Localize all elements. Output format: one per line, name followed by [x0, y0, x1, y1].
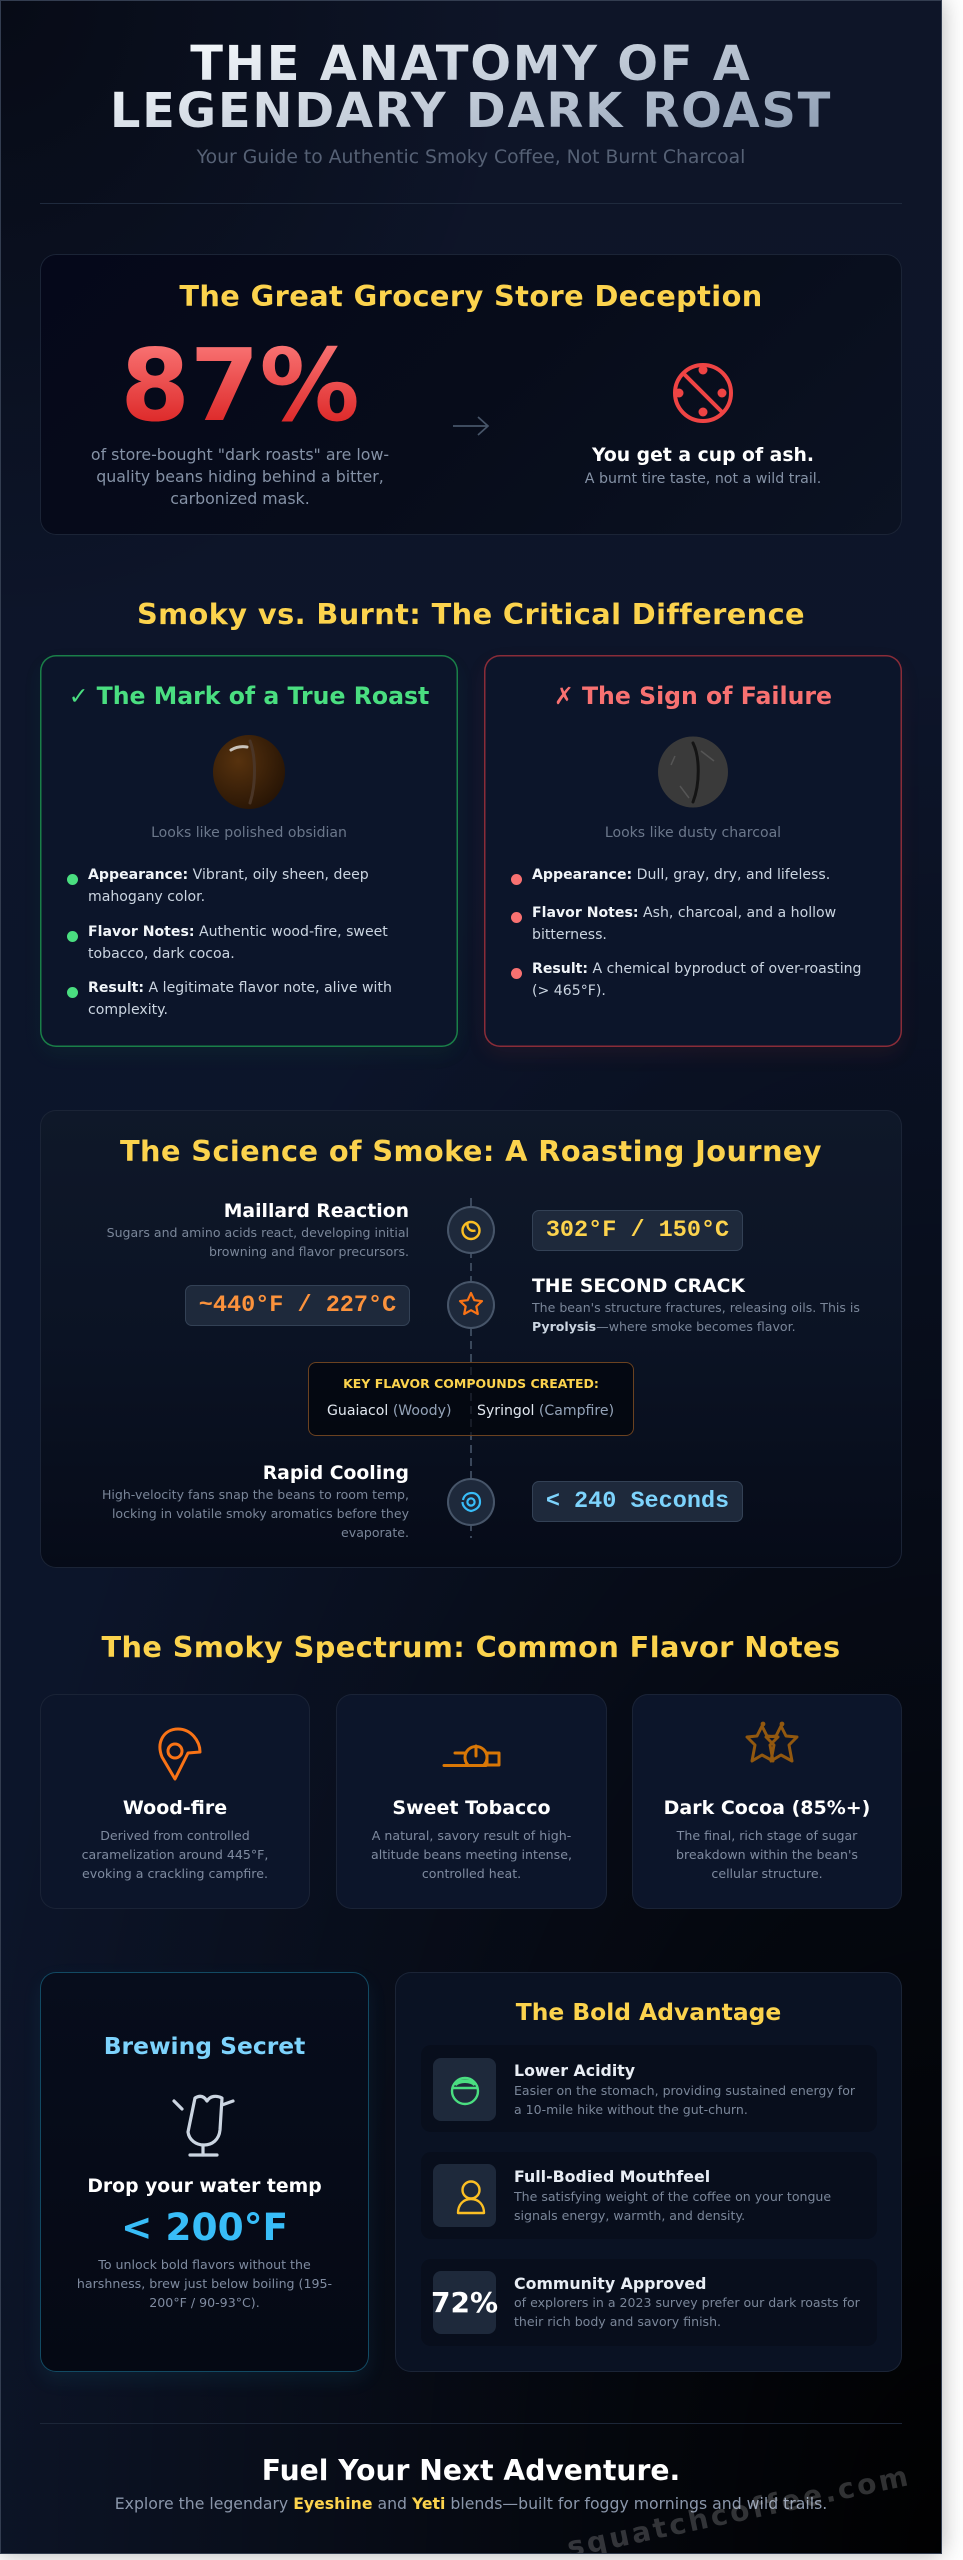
step: second crack text: Pyrolysis—where smoke becomes flavor. — [532, 1319, 796, 1334]
list: traits: Appearance: Vibrant, oily sheen, deep — [88, 867, 369, 883]
footer heading: Fuel Your Next Adventure. — [262, 2454, 680, 2487]
description — [676, 1828, 858, 1881]
description: cellular structure. — [711, 1866, 823, 1881]
item: mouthfeel: The satisfying weight of the coffee on your tongue — [514, 2189, 831, 2204]
list: traits: (> 465°F). — [532, 983, 606, 999]
panel: brewing secret — [40, 1972, 369, 2372]
list: traits: Result: A legitimate flavor note, alive with — [88, 980, 392, 996]
temperature: cooling — [532, 1481, 743, 1522]
card: sweet tobacco — [336, 1694, 607, 1909]
icon: cooling node — [447, 1478, 495, 1526]
stat: 72% — [433, 2271, 496, 2334]
step: maillard text: Maillard Reaction — [224, 1201, 409, 1222]
description: The final, rich stage of sugar — [677, 1828, 857, 1843]
stat: 72%: 72% — [431, 2286, 498, 2319]
icon: ph — [433, 2058, 496, 2121]
icon: person — [433, 2164, 496, 2227]
list: traits: tobacco, dark cocoa. — [88, 946, 235, 962]
description: altitude beans meeting intense, — [371, 1847, 572, 1862]
temperature: maillard: 302°F / 150°C — [546, 1217, 729, 1244]
description: A natural, savory result of high- — [372, 1828, 571, 1843]
caption: Looks like dusty charcoal — [605, 825, 781, 841]
statistic caption: carbonized mask. — [170, 489, 310, 508]
item: community: their rich body and savory finish. — [514, 2314, 721, 2329]
icon: oily bean — [213, 735, 285, 809]
description: harshness, brew just below boiling (195- — [77, 2276, 332, 2291]
panel: grocery store deception — [40, 254, 902, 535]
heading: smoky vs burnt: Smoky vs. Burnt: The Critical Difference — [137, 597, 805, 631]
description: 200°F / 90-93°C). — [149, 2295, 260, 2310]
description: breakdown within the bean's — [676, 1847, 858, 1862]
step: rapid cooling text: locking in volatile smoky aromatics before they — [112, 1506, 409, 1521]
description: evoking a crackling campfire. — [82, 1866, 268, 1881]
step: rapid cooling text: evaporate. — [341, 1525, 409, 1540]
item: lower acidity: Easier on the stomach, providing sustained energy for — [514, 2083, 855, 2098]
step: rapid cooling text: High-velocity fans snap the beans to room temp, — [102, 1487, 409, 1502]
heading: ✓ The Mark of a True Roast — [69, 682, 429, 710]
result caption: A burnt tire taste, not a wild trail. — [585, 471, 821, 487]
statistic caption: quality beans hiding behind a bitter, — [96, 467, 384, 486]
footer text: Explore the legendary Eyeshine and Yeti blends—built for foggy mornings and wild trails. — [115, 2494, 827, 2513]
heading: The Bold Advantage — [516, 1998, 781, 2026]
icon: cocoa stars — [746, 1722, 798, 1763]
callout: key flavor compounds — [308, 1362, 634, 1436]
panel: sign of failure — [484, 655, 902, 1047]
heading: The Science of Smoke: A Roasting Journey — [120, 1134, 822, 1168]
icon: burnt bean — [658, 736, 728, 808]
heading: smoky spectrum: The Smoky Spectrum: Common Flavor Notes — [101, 1630, 841, 1664]
callout: key flavor compounds: KEY FLAVOR COMPOUNDS CREATED: — [343, 1376, 599, 1391]
arrow — [453, 416, 490, 436]
description: Derived from controlled — [100, 1828, 250, 1843]
statistic: 87%: 87% — [120, 327, 360, 444]
item: lower acidity: a 10-mile hike without the gut-churn. — [514, 2102, 748, 2117]
panel: science of smoke timeline — [40, 1110, 902, 1568]
step: maillard text: browning and flavor precursors. — [209, 1244, 409, 1259]
item: community: of explorers in a 2023 survey prefer our dark roasts for — [514, 2295, 860, 2310]
list: traits: complexity. — [88, 1002, 168, 1018]
title: LEGENDARY DARK ROAST — [110, 83, 832, 139]
list: traits: Appearance: Dull, gray, dry, and lifeless. — [532, 867, 830, 883]
icon: fire pin — [158, 1728, 202, 1781]
callout: key flavor compounds: Syringol (Campfire) — [477, 1403, 614, 1419]
step: maillard text — [107, 1201, 409, 1259]
list: traits — [511, 867, 861, 999]
temperature: second crack: ~440°F / 227°C — [199, 1292, 396, 1319]
list: traits — [67, 867, 392, 1018]
item: community: Community Approved — [514, 2274, 706, 2293]
callout: key flavor compounds: Guaiacol (Woody) — [327, 1403, 451, 1419]
step: rapid cooling text — [102, 1463, 409, 1540]
result heading: You get a cup of ash. — [592, 445, 814, 466]
icon: goblet — [172, 2094, 235, 2157]
title: Dark Cocoa (85%+) — [664, 1797, 870, 1819]
statistic: 87% — [80, 336, 400, 436]
statistic caption: of store-bought "dark roasts" are low- — [91, 445, 389, 464]
icon: no / ash — [673, 363, 733, 423]
card: wood-fire — [40, 1694, 310, 1909]
list: traits: Result: A chemical byproduct of over-roasting — [532, 961, 861, 977]
heading: ✗ The Sign of Failure — [554, 682, 832, 710]
temperature: second crack — [185, 1285, 410, 1326]
heading: Brewing Secret — [104, 2032, 305, 2060]
panel: bold advantage — [395, 1972, 902, 2372]
step: second crack text: THE SECOND CRACK — [532, 1276, 745, 1297]
item: community — [421, 2259, 877, 2346]
footer — [115, 2454, 827, 2513]
list: traits: Flavor Notes: Authentic wood-fire, sweet — [88, 924, 388, 940]
step: rapid cooling text: Rapid Cooling — [263, 1463, 409, 1484]
description — [82, 1828, 268, 1881]
description: controlled heat. — [422, 1866, 521, 1881]
icon: second crack node — [447, 1281, 495, 1329]
title — [0, 41, 942, 135]
caption: Looks like polished obsidian — [151, 825, 347, 841]
temperature callout: < 200°F — [121, 2205, 288, 2249]
description: caramelization around 445°F, — [82, 1847, 268, 1862]
step: maillard text: Sugars and amino acids react, developing initial — [107, 1225, 409, 1240]
icon: pipe — [442, 1744, 500, 1767]
temperature: maillard — [532, 1210, 743, 1251]
item: mouthfeel: signals energy, warmth, and density. — [514, 2208, 745, 2223]
temperature: cooling: < 240 Seconds — [546, 1488, 729, 1515]
list: traits: mahogany color. — [88, 889, 205, 905]
header: title block — [110, 36, 832, 168]
list: traits: Flavor Notes: Ash, charcoal, and a hollow — [532, 905, 836, 921]
subheading: Drop your water temp — [87, 2176, 322, 2197]
timeline line — [470, 1198, 472, 1538]
list: traits: bitterness. — [532, 927, 607, 943]
icon: maillard node — [447, 1206, 495, 1254]
heading: The Great Grocery Store Deception — [179, 279, 763, 313]
step: second crack text — [532, 1276, 860, 1334]
statistic caption — [91, 445, 389, 508]
title: Wood-fire — [123, 1797, 227, 1819]
title: THE ANATOMY OF A — [190, 36, 752, 92]
panel: true roast — [40, 655, 458, 1047]
step: second crack text: The bean's structure fractures, releasing oils. This is — [532, 1300, 860, 1315]
item: mouthfeel: Full-Bodied Mouthfeel — [514, 2167, 710, 2186]
card: dark cocoa — [632, 1694, 902, 1909]
description: To unlock bold flavors without the — [98, 2257, 311, 2272]
item: lower acidity: Lower Acidity — [514, 2061, 635, 2080]
title: Sweet Tobacco — [392, 1797, 551, 1819]
subtitle: Your Guide to Authentic Smoky Coffee, Not Burnt Charcoal — [197, 147, 745, 168]
item: mouthfeel — [421, 2152, 877, 2239]
item: lower acidity — [421, 2045, 877, 2132]
description — [371, 1828, 572, 1881]
description — [77, 2257, 332, 2310]
